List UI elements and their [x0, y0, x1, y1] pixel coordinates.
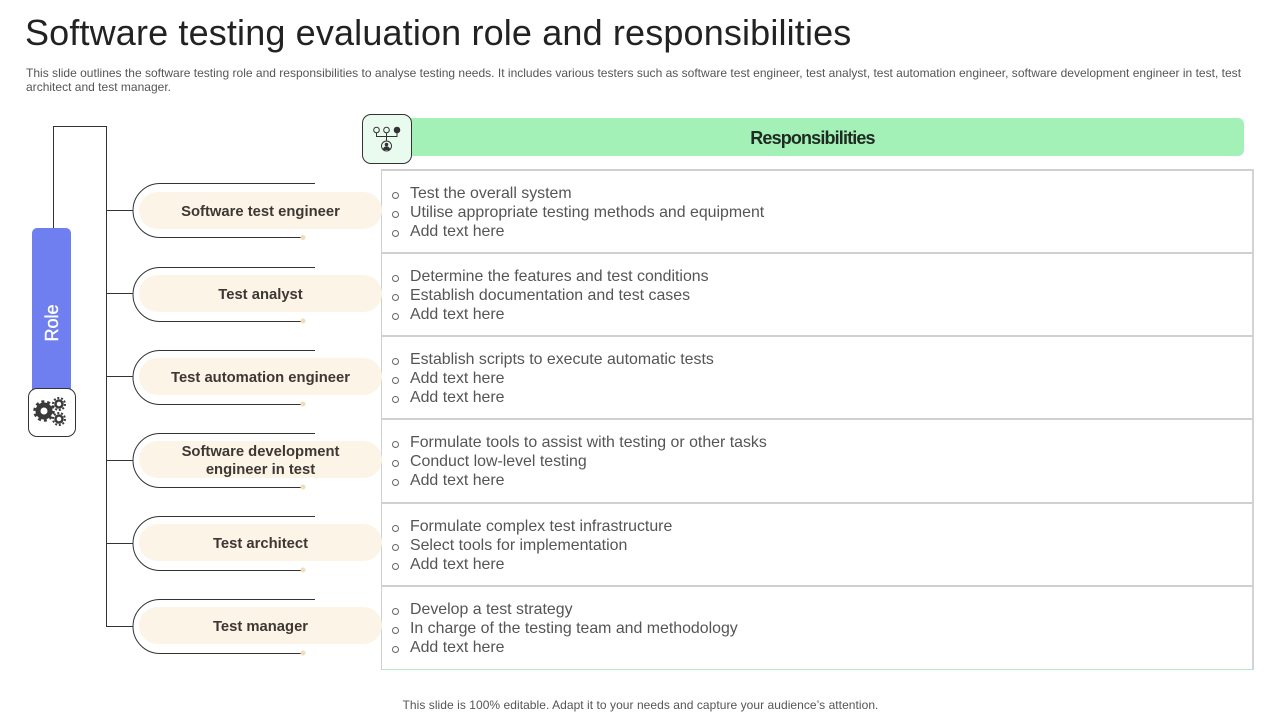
- role: software development engineer in test: Software development: [182, 444, 339, 460]
- list: test architect: Select tools for implementation: [410, 537, 627, 554]
- role: test analyst: [139, 275, 382, 312]
- role: software test engineer: Software test engineer: [181, 204, 340, 220]
- list: test automation engineer: Establish scripts to execute automatic tests: [410, 351, 714, 368]
- row 4: [381, 418, 1254, 503]
- list: test manager: In charge of the testing team and methodology: [410, 620, 738, 637]
- role: test automation engineer: Test automation engineer: [171, 370, 350, 386]
- icon: team hierarchy: [362, 114, 412, 164]
- list: software test engineer: [392, 185, 764, 240]
- list: software test engineer: Add text here: [410, 223, 505, 240]
- list: test automation engineer: [392, 351, 714, 406]
- row 6: [381, 585, 1254, 670]
- responsibilities header bar: Responsibilities: [750, 128, 875, 148]
- role label: Role: [42, 304, 62, 342]
- icon: gears: [28, 388, 76, 437]
- list: test manager: Add text here: [410, 639, 505, 656]
- connector tree: [53, 126, 315, 656]
- role: software development engineer in test: engineer in test: [206, 462, 315, 478]
- list: test analyst: Determine the features and test conditions: [410, 268, 709, 285]
- role: test architect: Test architect: [213, 536, 308, 552]
- list: test architect: [392, 518, 672, 573]
- list: software development engineer in test: Formulate tools to assist with testing or other tasks: [410, 434, 767, 451]
- description text: This slide outlines the software testing role and responsibilities to analyse testing needs. It includes various testers such as software test engineer, test analyst, test automation engineer, software development engineer in test, test architect and test manager.: [26, 66, 1241, 94]
- list: test automation engineer: Add text here: [410, 370, 505, 387]
- row 3: [381, 335, 1254, 419]
- row 2: [381, 252, 1254, 336]
- footer note: This slide is 100% editable. Adapt it to your needs and capture your audience’s attention.: [403, 698, 878, 712]
- role bar: [32, 228, 71, 398]
- row 5: [381, 502, 1254, 586]
- role: test architect: [139, 524, 382, 561]
- role: software test engineer: [139, 192, 382, 229]
- role: test analyst: Test analyst: [218, 287, 303, 303]
- list: software development engineer in test: [392, 434, 767, 489]
- role: test manager: Test manager: [213, 619, 308, 635]
- list: software development engineer in test: Add text here: [410, 472, 505, 489]
- list: test manager: Develop a test strategy: [410, 601, 573, 618]
- title: Software testing evaluation role and responsibilities: [25, 12, 851, 53]
- list: test architect: Formulate complex test infrastructure: [410, 518, 672, 535]
- role: software development engineer in test: [139, 441, 382, 478]
- list: test analyst: Establish documentation and test cases: [410, 287, 690, 304]
- role: test manager: [139, 607, 382, 644]
- list: test analyst: [392, 268, 709, 323]
- list: test analyst: Add text here: [410, 306, 505, 323]
- list: software test engineer: Utilise appropriate testing methods and equipment: [410, 204, 764, 221]
- list: test automation engineer: Add text here: [410, 389, 505, 406]
- responsibilities header bar: [405, 118, 1244, 156]
- list: test architect: Add text here: [410, 556, 505, 573]
- list: software test engineer: Test the overall system: [410, 185, 572, 202]
- row 1: [381, 169, 1254, 253]
- list: software development engineer in test: Conduct low-level testing: [410, 453, 587, 470]
- role: test automation engineer: [139, 358, 382, 395]
